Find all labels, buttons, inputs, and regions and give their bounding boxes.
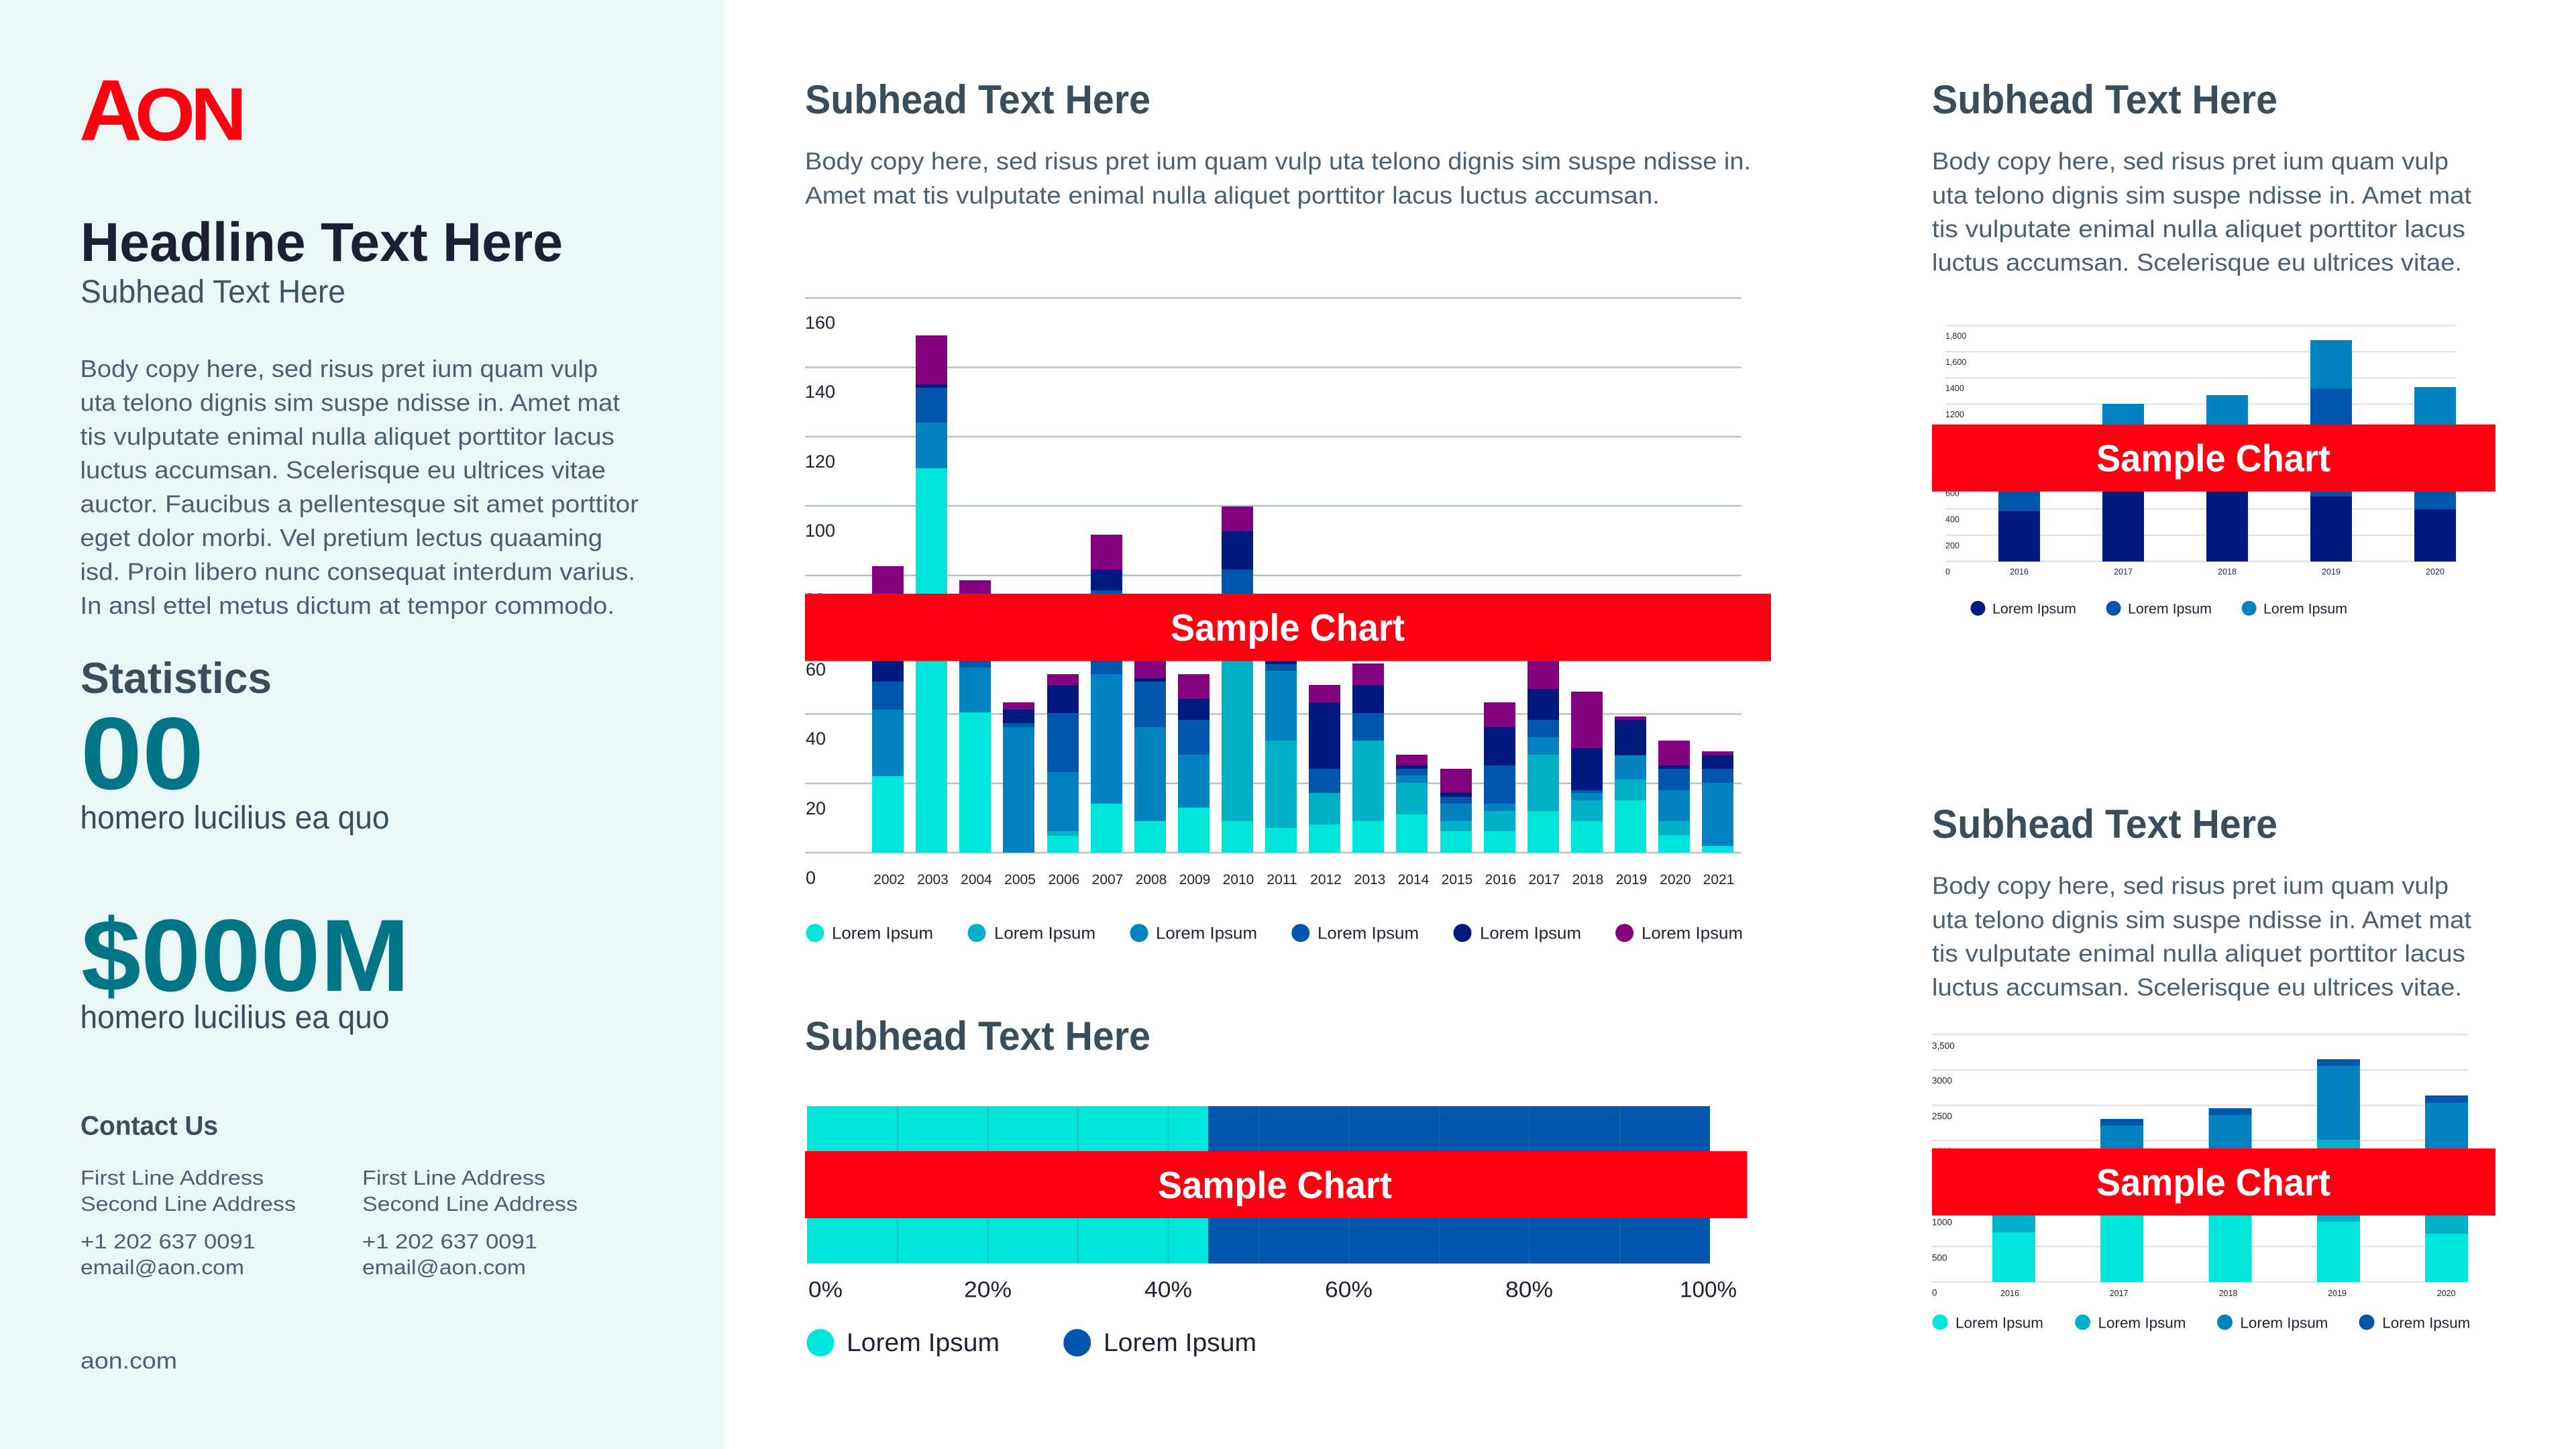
contact column 1: email@aon.com: [80, 1256, 244, 1279]
banner: sample chart: [1932, 425, 2496, 492]
y axis labels: 3,500: [1932, 1040, 1955, 1051]
x axis labels: 2016: [2010, 568, 2029, 577]
y axis labels: 500: [1932, 1252, 1947, 1263]
x axis labels: [2000, 1289, 2456, 1298]
x axis labels: 2005: [1004, 872, 1036, 888]
x axis labels: 2014: [1398, 872, 1430, 888]
y axis labels: 1,600: [1945, 358, 1966, 367]
contact column 2: Second Line Address: [362, 1192, 578, 1216]
bars: [1992, 1059, 2468, 1282]
body copy: Body copy here, sed risus pret ium quam vulp: [1932, 872, 2449, 900]
x axis labels: 2012: [1310, 872, 1342, 888]
bar chart: stacked columns 2016-2020: [1932, 1034, 2470, 1331]
x axis labels: 2020: [2437, 1289, 2456, 1298]
panel: right bottom section: [1932, 802, 2496, 1331]
body copy: luctus accumsan. Scelerisque eu ultrices vitae: [80, 456, 606, 484]
y axis labels: 100: [805, 521, 835, 541]
x axis labels: 2020: [1660, 872, 1691, 888]
banner: sample chart: Sample Chart: [1158, 1164, 1392, 1207]
x axis labels: 2003: [917, 872, 949, 888]
logo: Aon: [79, 62, 247, 159]
contact column 2: +1 202 637 0091: [362, 1230, 537, 1253]
legend: Lorem Ipsum: [2382, 1315, 2470, 1331]
body copy: Amet mat tis vulputate enimal nulla aliquet porttitor lacus luctus accumsan.: [805, 181, 1660, 209]
bar chart: stacked columns 2016-2020: [1945, 325, 2456, 617]
legend: [1932, 1315, 2470, 1331]
legend: [806, 924, 1743, 943]
y axis labels: 1400: [1945, 384, 1964, 393]
bars: [872, 335, 1733, 853]
legend: Lorem Ipsum: [1992, 601, 2076, 617]
statistics heading: Statistics: [80, 653, 272, 702]
legend: Lorem Ipsum: [847, 1329, 1000, 1357]
body copy: isd. Proin libero nunc consequat interdum varius.: [80, 558, 635, 585]
statistic: 00: [80, 696, 389, 836]
website: aon.com: [80, 1348, 177, 1374]
x axis labels: 2019: [2328, 1289, 2347, 1298]
y axis labels: 400: [1945, 515, 1960, 524]
y axis labels: [1932, 1040, 1955, 1298]
x axis labels: 2018: [2218, 568, 2237, 577]
y axis labels: 120: [805, 451, 835, 472]
statistic: $000M: homero lucilius ea quo: [80, 1000, 389, 1036]
body copy: luctus accumsan. Scelerisque eu ultrices vitae.: [1932, 248, 2462, 276]
legend: Lorem Ipsum: [1642, 924, 1743, 943]
legend: Lorem Ipsum: [1480, 924, 1581, 943]
y axis labels: 80: [805, 590, 825, 610]
legend: Lorem Ipsum: [2098, 1315, 2186, 1331]
legend: Lorem Ipsum: [1156, 924, 1257, 943]
body copy: [1932, 872, 2471, 1001]
x axis labels: [808, 1277, 1737, 1301]
legend: Lorem Ipsum: [1104, 1329, 1256, 1357]
x axis labels: 2015: [1442, 872, 1472, 888]
y axis labels: 40: [806, 729, 826, 749]
y axis labels: 1,000: [1945, 436, 1966, 445]
x axis labels: 2019: [2322, 568, 2341, 577]
x axis labels: 2018: [2219, 1289, 2238, 1298]
legend: Lorem Ipsum: [832, 924, 933, 943]
y axis labels: 2000: [1932, 1146, 1952, 1157]
banner: sample chart: [1932, 1148, 2496, 1216]
legend: [1971, 601, 2347, 617]
banner: sample chart: [805, 594, 1771, 661]
y axis labels: 200: [1945, 541, 1960, 551]
x axis labels: 2008: [1136, 872, 1167, 888]
legend: Lorem Ipsum: [1318, 924, 1419, 943]
body copy: Body copy here, sed risus pret ium quam vulp: [1932, 148, 2449, 175]
x axis labels: 2007: [1092, 872, 1123, 888]
statistic: $000M: $000M: [81, 898, 410, 1013]
x axis labels: 0%: [808, 1277, 843, 1301]
x axis labels: 2013: [1354, 872, 1385, 888]
y axis labels: 1000: [1932, 1218, 1952, 1228]
y axis labels: 0: [1932, 1288, 1937, 1298]
statistic: 00: homero lucilius ea quo: [80, 800, 389, 836]
y axis labels: 1200: [1945, 410, 1964, 419]
x axis labels: 2018: [1572, 872, 1603, 888]
body copy: Body copy here, sed risus pret ium quam vulp: [80, 355, 598, 382]
bar chart: 100% stacked bar: [807, 1106, 1710, 1264]
contact column 2: [362, 1166, 578, 1279]
body copy: tis vulputate enimal nulla aliquet porttitor lacus: [80, 423, 614, 450]
y axis labels: 0: [806, 868, 816, 888]
x axis labels: 2019: [1616, 872, 1647, 888]
x axis labels: 2020: [2426, 568, 2445, 577]
legend: Lorem Ipsum: [994, 924, 1095, 943]
x axis labels: 40%: [1144, 1277, 1192, 1301]
x axis labels: 2016: [2000, 1289, 2019, 1298]
y axis labels: 800: [1945, 462, 1960, 472]
y axis labels: 2500: [1932, 1111, 1952, 1121]
body copy: Body copy here, sed risus pret ium quam vulp uta telono dignis sim suspe ndisse in.: [805, 148, 1751, 175]
contact column 1: [80, 1166, 296, 1279]
panel: main stacked chart section: [805, 77, 1771, 943]
x axis labels: 80%: [1505, 1277, 1553, 1301]
banner: sample chart: Sample Chart: [2096, 437, 2330, 480]
body copy: eget dolor morbi. Vel pretium lectus quaaming: [80, 524, 602, 551]
contact column 1: Second Line Address: [80, 1192, 296, 1216]
subhead: Subhead Text Here: [80, 274, 345, 310]
y axis labels: 3000: [1932, 1076, 1952, 1086]
panel: left sidebar: [0, 0, 724, 1449]
y axis labels: 20: [806, 798, 826, 818]
y axis labels: [805, 313, 835, 888]
bars: [1998, 340, 2456, 561]
y axis labels: 1,800: [1945, 331, 1966, 341]
body copy: uta telono dignis sim suspe ndisse in. Amet mat: [80, 389, 620, 416]
y axis labels: 160: [805, 313, 835, 333]
y axis labels: 140: [805, 382, 835, 402]
panel: horizontal stacked bar section: [805, 1014, 1747, 1357]
legend: Lorem Ipsum: [1955, 1315, 2043, 1331]
subhead: Subhead Text Here: [805, 77, 1150, 122]
legend: Lorem Ipsum: [2263, 601, 2347, 617]
contact heading: Contact Us: [80, 1112, 218, 1141]
logo: Aon: O: [135, 74, 195, 156]
banner: sample chart: Sample Chart: [1171, 606, 1405, 649]
bar chart: stacked columns 2002-2021: [805, 298, 1743, 943]
x axis labels: 2017: [2114, 568, 2133, 577]
subhead: Subhead Text Here: [805, 1014, 1150, 1059]
body copy: [1932, 148, 2471, 276]
y axis labels: [1945, 331, 1966, 577]
y axis labels: 1500: [1932, 1182, 1952, 1192]
body copy: tis vulputate enimal nulla aliquet porttitor lacus: [1932, 215, 2465, 243]
y axis labels: 0: [1945, 568, 1950, 577]
body copy: uta telono dignis sim suspe ndisse in. Amet mat: [1932, 906, 2471, 934]
subhead: Subhead Text Here: [1932, 77, 2277, 122]
body copy: [805, 148, 1751, 209]
x axis labels: 2004: [961, 872, 992, 888]
banner: sample chart: Sample Chart: [2096, 1161, 2330, 1204]
x axis labels: 2011: [1267, 872, 1297, 888]
x axis labels: 2016: [1485, 872, 1516, 888]
x axis labels: 20%: [964, 1277, 1012, 1301]
contact column 1: First Line Address: [80, 1166, 264, 1189]
body copy: [80, 355, 639, 619]
x axis labels: 2010: [1223, 872, 1254, 888]
x axis labels: 2002: [873, 872, 905, 888]
x axis labels: 2021: [1703, 872, 1734, 888]
x axis labels: 2017: [2110, 1289, 2129, 1298]
legend: Lorem Ipsum: [2128, 601, 2212, 617]
panel: right top section: [1932, 77, 2496, 617]
x axis labels: [873, 872, 1734, 888]
body copy: luctus accumsan. Scelerisque eu ultrices vitae.: [1932, 973, 2462, 1001]
banner: sample chart: [805, 1151, 1747, 1218]
body copy: auctor. Faucibus a pellentesque sit amet porttitor: [80, 490, 639, 518]
statistic: 00: 00: [80, 696, 204, 811]
legend: Lorem Ipsum: [2240, 1315, 2328, 1331]
contact column 1: +1 202 637 0091: [80, 1230, 256, 1253]
legend: [806, 1329, 1256, 1357]
logo: Aon: N: [191, 73, 247, 156]
y axis labels: 600: [1945, 488, 1960, 498]
body copy: In ansl ettel metus dictum at tempor commodo.: [80, 592, 614, 619]
x axis labels: 100%: [1680, 1277, 1737, 1301]
body copy: uta telono dignis sim suspe ndisse in. Amet mat: [1932, 181, 2471, 209]
logo: Aon: A: [79, 62, 142, 159]
subhead: Subhead Text Here: [1932, 802, 2277, 847]
y axis labels: 60: [806, 659, 826, 680]
headline: Headline Text Here: [80, 212, 563, 273]
contact column 2: First Line Address: [362, 1166, 545, 1189]
x axis labels: [2010, 568, 2445, 577]
x axis labels: 2009: [1179, 872, 1210, 888]
x axis labels: 60%: [1325, 1277, 1373, 1301]
contact column 2: email@aon.com: [362, 1256, 526, 1279]
x axis labels: 2017: [1529, 872, 1560, 888]
x axis labels: 2006: [1049, 872, 1079, 888]
body copy: tis vulputate enimal nulla aliquet porttitor lacus: [1932, 939, 2465, 967]
